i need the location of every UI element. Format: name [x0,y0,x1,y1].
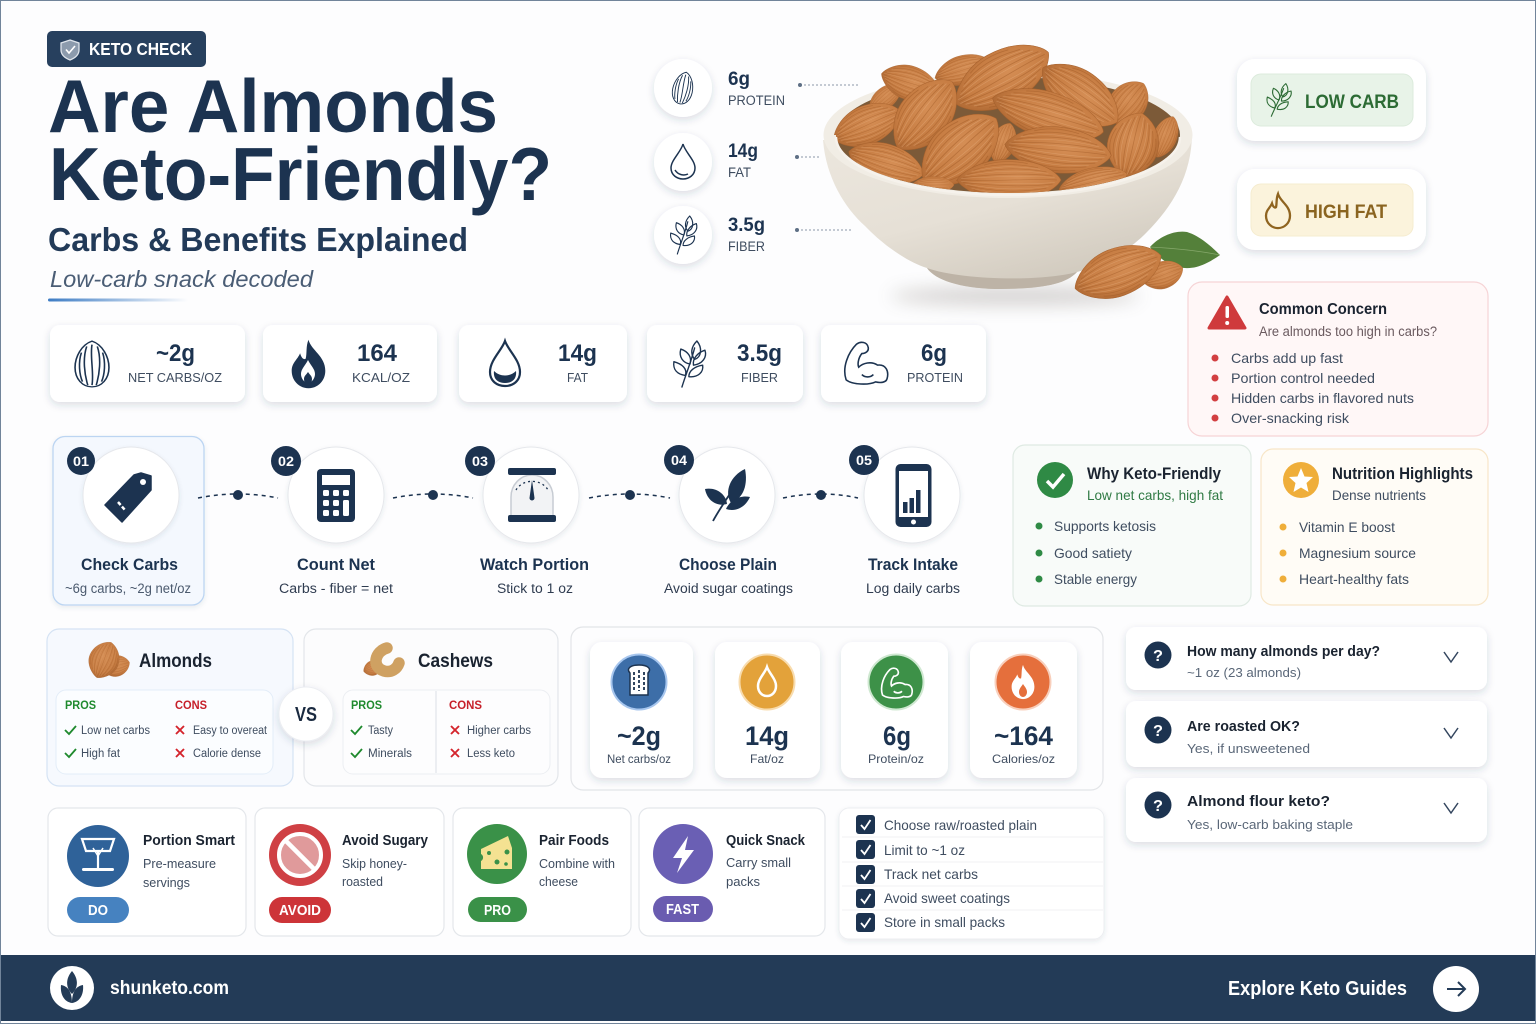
fact: calories [970,642,1077,778]
connector dots [233,490,826,500]
highlights list [1280,519,1416,587]
checklist item 5 [856,913,1005,932]
footer bar: shunketo.com [110,978,229,999]
comparison: almonds [47,629,293,786]
cons list: Higher carbs [467,725,531,737]
tip: pair foods: Combine with [539,856,615,871]
checklist item 3 [856,865,978,884]
checklist item 2 [856,840,965,859]
stat card: protein: PROTEIN [907,370,963,385]
faq: how many [1126,627,1487,690]
checklist item 4 [856,889,1010,908]
tip: pair foods: cheese [539,874,578,889]
pros list: Tasty [368,725,393,737]
fact: calories: ~164 [994,721,1053,751]
tip: avoid sugary: Avoid Sugary [342,833,428,849]
subtitle: Carbs & Benefits Explained [48,221,468,258]
checklist item 2: Limit to ~1 oz [884,842,965,858]
cons list [449,698,531,760]
bowl body [823,133,1192,289]
faq: how many: How many almonds per day? [1187,644,1380,660]
highlights list: Magnesium source [1299,545,1416,561]
faq: roasted: Yes, if unsweetened [1187,741,1310,756]
stat card: fat: 14g [558,340,597,367]
loose almonds [1066,233,1187,311]
step 02: Carbs - fiber = net [279,581,393,596]
pros list [65,698,150,760]
highlights list: Vitamin E boost [1299,519,1395,535]
step 02: Count Net [297,555,375,574]
checklist [839,808,1104,939]
tip: quick snack [639,808,825,936]
tag: low carb: LOW CARB [1305,91,1399,113]
title: Keto-Friendly? [49,132,552,216]
stat card: protein: 6g [921,340,947,367]
leaf [1150,232,1220,268]
icon: cashew [361,648,399,678]
tip: portion smart: DO [88,903,108,919]
step 03: Stick to 1 oz [497,581,573,596]
concern list: Hidden carbs in flavored nuts [1231,390,1414,406]
tip: pair foods: PRO [484,903,511,919]
pros list: Minerals [368,748,412,760]
step 01 [65,447,191,596]
checklist item 1 [856,815,1037,834]
step 03 [465,446,589,596]
faq: almond flour: Almond flour keto? [1187,794,1330,810]
callout: fat: FAT [728,165,751,180]
footer logo [50,966,94,1010]
benefits list [1036,518,1156,587]
callout: fiber: 3.5g [728,215,765,236]
concern list: Over-snacking risk [1231,410,1350,426]
panel: why keto-friendly: Why Keto-Friendly [1087,465,1222,483]
panel: why keto-friendly: Low net carbs, high fat [1087,487,1223,503]
tagline underline [48,298,188,302]
tip: portion smart: servings [143,875,190,890]
icon: warning triangle [1209,297,1245,328]
step 01: ~6g carbs, ~2g net/oz [65,581,191,596]
stat card: net carbs: ~2g [156,340,195,367]
callout: protein: PROTEIN [728,93,785,108]
faq: almond flour: Yes, low-carb baking staple [1187,817,1353,832]
panel: common concern: Common Concern [1259,301,1387,318]
panel: nutrition highlights: Dense nutrients [1332,487,1426,503]
concern list: Portion control needed [1231,370,1375,386]
checklist item 4: Avoid sweet coatings [884,890,1010,906]
comparison: cashews [304,629,558,786]
tip: avoid sugary: Skip honey- [342,856,407,871]
benefits list: Good satiety [1054,545,1132,561]
checklist item 3: Track net carbs [884,866,978,882]
tip: portion smart [48,808,246,936]
bowl rim [824,72,1192,198]
tip: quick snack: Quick Snack [726,833,806,849]
tip: avoid sugary: AVOID [279,903,321,919]
faq: almond flour [1126,778,1487,842]
bowl shadow [890,287,1140,305]
faq: how many: ? [1153,648,1163,665]
fact: protein: 6g [883,721,911,751]
step 05 [849,445,960,596]
highlights list: Heart-healthy fats [1299,571,1409,587]
title [48,64,552,216]
concern list [1212,350,1414,426]
pros list: PROS [65,698,96,712]
tip: avoid sugary: roasted [342,874,383,889]
cons list: Calorie dense [193,748,261,760]
stat card: calories: 164 [357,340,398,367]
step 03: 03 [472,453,488,469]
fact: protein: Protein/oz [868,752,924,766]
cons list: Easy to overeat [193,725,268,737]
nutrient callouts beside bowl [654,59,858,264]
step 02 [271,446,393,596]
faq: almond flour: ? [1153,798,1163,815]
tip: quick snack: FAST [666,902,699,918]
step 04: Avoid sugar coatings [664,581,793,596]
step 04: Choose Plain [679,555,777,574]
tip: avoid sugary [255,808,444,936]
comparison: almonds: Almonds [139,651,212,672]
callout: fat [654,133,820,191]
stat card: fiber: FIBER [741,370,778,385]
stat card: fat: FAT [567,370,588,385]
title: Are Almonds [48,64,498,148]
benefits list: Supports ketosis [1054,518,1156,534]
step 05: 05 [856,452,872,468]
panel: common concern: Are almonds too high in carbs? [1259,324,1437,339]
tip cards [48,808,825,936]
tip: pair foods: Pair Foods [539,833,609,849]
panel: why keto-friendly [1013,445,1251,606]
step 03: Watch Portion [480,555,589,574]
tip: quick snack: Carry small [726,855,791,870]
tag: high fat: HIGH FAT [1305,201,1387,223]
stat cards row [50,325,986,402]
pros list: Low net carbs [81,725,150,737]
faq: roasted [1126,701,1487,767]
callout: fat: 14g [728,141,758,162]
cons list: CONS [449,698,482,712]
connectors [198,494,858,498]
stat card: net carbs [50,325,245,402]
comparison: cashews: Cashews [418,651,493,672]
badge: keto check: KETO CHECK [89,39,192,59]
panel: nutrition facts per ounce [571,627,1103,790]
panel: nutrition highlights: Nutrition Highlights [1332,465,1473,483]
panel: common concern [1188,282,1488,436]
pros list: High fat [81,748,121,760]
footer bar: Explore Keto Guides [1228,978,1407,1000]
footer arrow button [1433,966,1479,1012]
cons list: Less keto [467,748,515,760]
fact: fat [715,642,820,778]
step 04 [664,445,793,596]
stat card: net carbs: NET CARBS/OZ [128,370,222,385]
fact: fat: 14g [745,721,789,751]
faq: roasted: Are roasted OK? [1187,719,1300,735]
step 1 highlight card [53,436,204,605]
tag: low carb [1237,59,1426,141]
callout: fiber: FIBER [728,239,765,254]
icon: star [1283,462,1319,498]
fact: net carbs: Net carbs/oz [607,752,671,766]
footer bar [1,955,1535,1021]
tip: portion smart: Pre-measure [143,856,216,871]
vs badge: VS [295,704,317,726]
tip: pair foods [453,808,631,936]
tip: portion smart: Portion Smart [143,833,235,849]
stat card: calories: KCAL/OZ [352,370,410,385]
checklist item 1: Choose raw/roasted plain [884,817,1037,833]
vs badge [279,687,333,741]
fact: fat: Fat/oz [750,752,784,766]
fact: net carbs: ~2g [617,721,661,751]
callout: fiber [654,206,852,264]
step 04: 04 [671,452,687,468]
benefits list: Stable energy [1054,571,1137,587]
step 02: 02 [278,453,294,469]
step 05: Track Intake [868,555,958,574]
fact: net carbs [590,642,693,778]
process steps [53,436,960,605]
stat card: fiber: 3.5g [737,340,782,367]
pros list [351,698,412,760]
step 01: Check Carbs [81,555,178,574]
badge: keto check [47,31,206,67]
cons list: CONS [175,698,207,712]
step 01: 01 [73,453,89,469]
callout: protein [654,59,858,117]
fact: calories: Calories/oz [992,752,1055,766]
icon: green check [1037,462,1073,498]
stat card: protein [821,325,986,402]
header: title block [47,31,552,302]
stat card: calories [263,325,437,402]
stat card: fat [459,325,627,402]
bowl of almonds illustration [823,29,1220,311]
bowl front rim highlight [836,137,1180,195]
tip: quick snack: packs [726,874,760,889]
almonds in bowl [834,44,1178,193]
icon: almonds [83,637,132,683]
faq: roasted: ? [1153,723,1163,740]
cons list [175,698,268,760]
checklist item 5: Store in small packs [884,914,1005,930]
step 05: Log daily carbs [866,581,960,596]
tagline: Low-carb snack decoded [50,266,314,292]
tag: high fat [1237,169,1426,250]
callout: protein: 6g [728,69,750,90]
fact: protein [841,642,948,778]
concern list: Carbs add up fast [1231,350,1343,366]
faq list [1126,627,1487,842]
panel: nutrition highlights [1261,449,1488,605]
pros list: PROS [351,698,382,712]
faq: how many: ~1 oz (23 almonds) [1187,665,1301,680]
stat card: fiber [647,325,803,402]
